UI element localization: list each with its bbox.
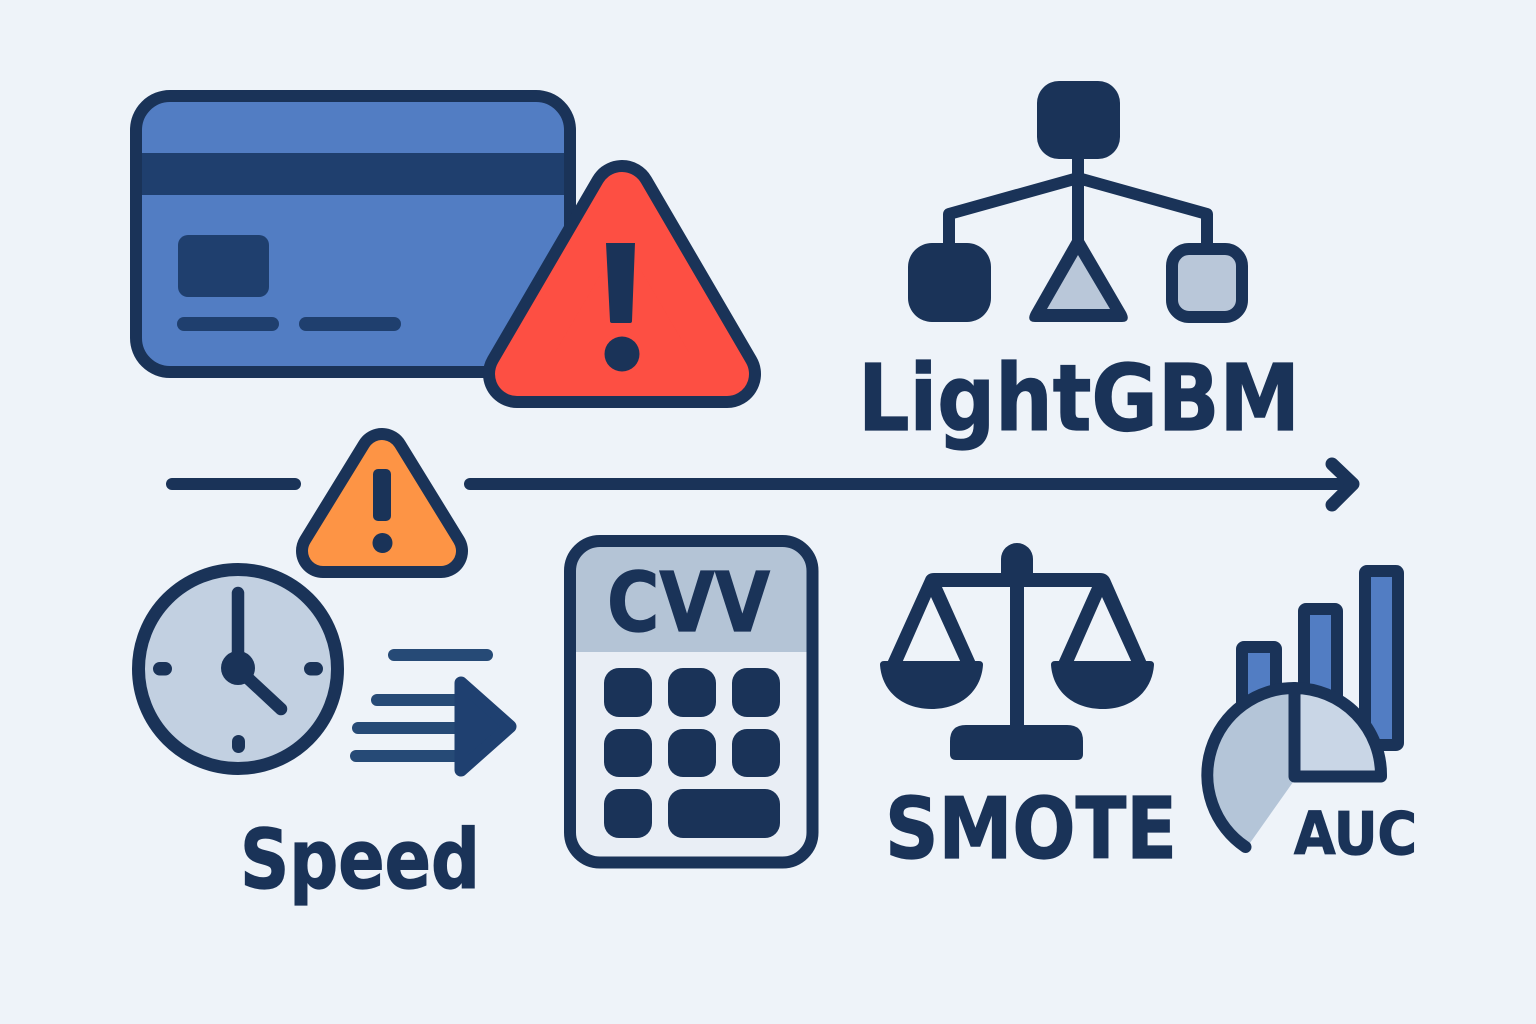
- icon: credit card: [136, 96, 570, 372]
- pie: main wedge: [1207, 688, 1294, 847]
- pie: quarter wedge: [1294, 688, 1381, 776]
- bar: medium: [1304, 609, 1337, 709]
- icon: clock: [138, 570, 338, 768]
- icon: speed arrow: [350, 649, 510, 770]
- chart: bars and pie: [1207, 571, 1398, 847]
- label: AUC: AUC: [1294, 799, 1417, 868]
- icon: balance scale: [880, 543, 1154, 760]
- heading: LightGBM: LightGBM: [858, 345, 1300, 452]
- label: SMOTE: SMOTE: [885, 780, 1177, 879]
- icon: red warning triangle: [517, 194, 727, 374]
- icon: decision tree: [908, 81, 1242, 322]
- icon: CVV keypad: [570, 541, 812, 862]
- icon: orange warning triangle: [323, 455, 441, 553]
- bar: short: [1242, 647, 1276, 722]
- arrow: timeline: [172, 464, 1353, 505]
- label: Speed: Speed: [240, 813, 480, 908]
- bar: tall: [1365, 571, 1398, 745]
- label: CVV: CVV: [607, 556, 770, 651]
